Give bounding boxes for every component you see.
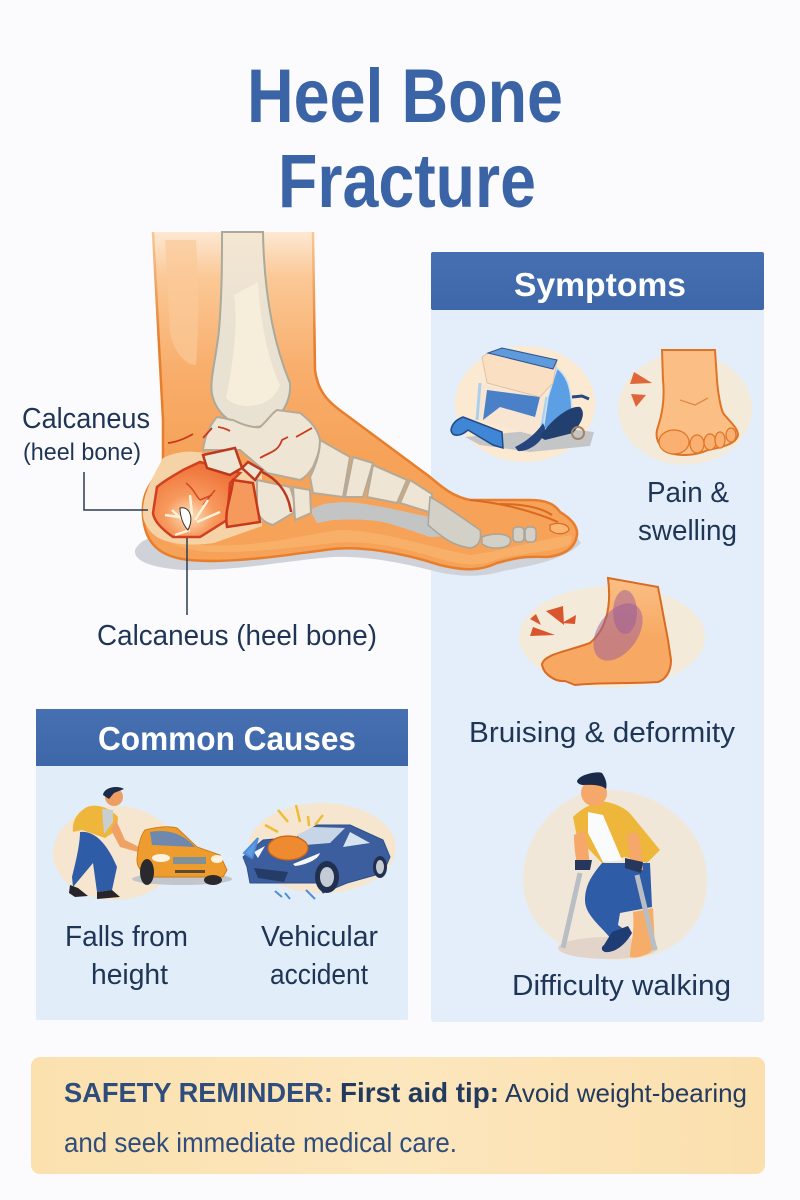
- tibia highlight: [226, 282, 280, 406]
- icon: car accident: [243, 803, 396, 899]
- blue car body: [243, 825, 390, 893]
- impact rays: [265, 805, 323, 832]
- windshield: [297, 827, 345, 845]
- impact sparks: [165, 495, 220, 535]
- blue frame: [478, 383, 547, 437]
- text: pain and swelling: Pain &: [647, 477, 729, 509]
- callout: calcaneus heel bone left: [22, 403, 150, 510]
- crutch right: [637, 875, 655, 950]
- safety reminder callout: and seek immediate medical care.: [64, 1127, 457, 1158]
- text: difficulty walking: Difficulty walking: [512, 970, 731, 1002]
- callout: calcaneus heel bone left: (heel bone): [23, 439, 141, 466]
- common causes header: Common Causes: [98, 720, 356, 757]
- bruise: [583, 594, 653, 670]
- trousers: [585, 863, 652, 940]
- text: falls from height: Falls from: [65, 921, 188, 953]
- crutch handles: [575, 858, 643, 873]
- injured leg: [630, 908, 655, 958]
- arms: [574, 830, 643, 870]
- trousers: [72, 832, 117, 892]
- safety reminder callout: [31, 1057, 765, 1174]
- icon: bruised foot: [519, 578, 705, 688]
- crack lines: [168, 427, 312, 458]
- text: pain and swelling: swelling: [638, 515, 737, 547]
- text: vehicular accident: [261, 921, 378, 991]
- orange car: [137, 827, 227, 877]
- jacket: [573, 802, 660, 863]
- callout: calcaneus heel bone left: Calcaneus: [22, 403, 150, 435]
- title: Heel Bone: [247, 54, 563, 139]
- icon: swollen foot: [618, 350, 752, 465]
- cream rim around heel: [143, 452, 262, 545]
- icon: person on crutches: [523, 772, 707, 960]
- side window: [343, 832, 370, 847]
- text: falls from height: [65, 921, 188, 991]
- inner leg highlight: [165, 240, 198, 365]
- text: vehicular accident: Vehicular: [261, 921, 378, 953]
- icon: man falling by car: [53, 787, 232, 900]
- big toe nail: [550, 523, 569, 534]
- arch shadow: [310, 502, 470, 537]
- toe lines: [470, 500, 558, 522]
- arm: [111, 820, 141, 852]
- foot shadow: [135, 535, 581, 576]
- shirt: [102, 809, 113, 834]
- fractured calcaneus: [153, 448, 291, 537]
- toes: [659, 428, 736, 454]
- panel: symptoms: [431, 252, 764, 1022]
- wheels: [140, 859, 154, 885]
- text: falls from height: height: [91, 959, 168, 991]
- foot silhouette fill: [143, 232, 577, 569]
- base rail: [451, 417, 503, 448]
- shoe: [602, 926, 632, 952]
- foot outline: [143, 232, 577, 569]
- safety reminder callout: Avoid weight-bearing: [505, 1078, 747, 1108]
- wheels: [315, 861, 339, 893]
- safety reminder callout: SAFETY REMINDER:: [64, 1077, 333, 1108]
- text: vehicular accident: accident: [270, 959, 368, 991]
- torso jacket: [73, 806, 118, 838]
- icon: brace device: [451, 346, 595, 462]
- front wheel: [515, 423, 545, 451]
- shirt: [588, 812, 622, 862]
- pain marks: [630, 372, 652, 407]
- dark seat: [540, 407, 583, 440]
- cream box: [482, 353, 557, 397]
- head: [105, 788, 123, 806]
- headlights: [293, 853, 320, 866]
- safety reminder callout: First aid tip:: [340, 1077, 499, 1108]
- tibia bone: [211, 232, 290, 427]
- hair: [103, 787, 124, 799]
- callout: calcaneus heel bone bottom: Calcaneus (heel bone): [97, 620, 377, 652]
- title: [247, 54, 563, 224]
- head: [581, 780, 607, 806]
- symptoms header: [431, 252, 764, 310]
- symptoms header: Symptoms: [514, 266, 686, 303]
- sole band: [147, 510, 572, 564]
- text: pain and swelling: [638, 477, 737, 547]
- title: Fracture: [278, 139, 536, 224]
- panel: common causes: [36, 709, 408, 1020]
- crutch left: [563, 873, 580, 948]
- metatarsal and toe bones: [428, 497, 536, 548]
- foot anatomy illustration: [135, 232, 581, 576]
- common causes header: [36, 709, 408, 766]
- pain marks: [530, 606, 576, 636]
- tarsal bones: [203, 410, 432, 525]
- grille: [254, 868, 288, 882]
- text: bruising and deformity: Bruising & deformity: [469, 717, 735, 749]
- debris: [244, 838, 315, 899]
- hair: [577, 772, 607, 789]
- crumpled orange hood: [268, 836, 308, 860]
- shoes: [69, 885, 120, 899]
